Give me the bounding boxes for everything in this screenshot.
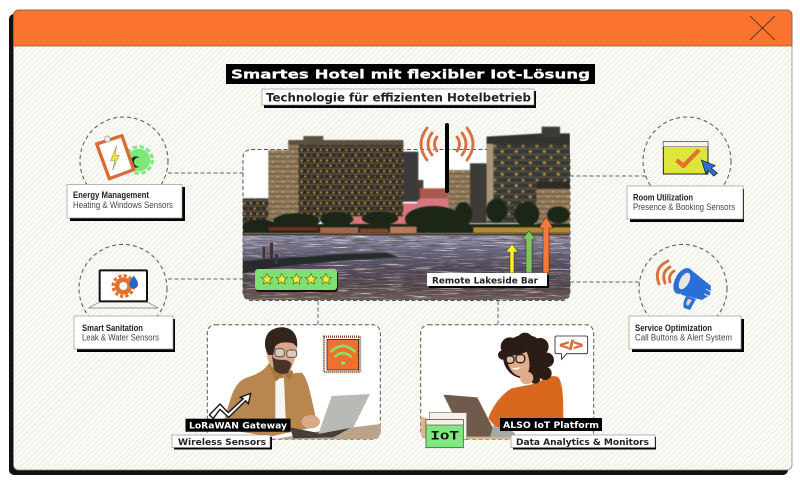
gateway label: LoRaWAN Gateway [189,422,287,432]
subtitle [262,89,536,108]
hand [520,372,533,384]
hotel scene [243,127,570,300]
arrow: green signal [522,231,536,273]
wireless sensors label [172,435,272,450]
laptop lid [318,394,370,434]
beard [272,353,292,374]
room label: Presence & Booking Sensors [633,202,736,212]
title: Smartes Hotel mit flexibler Iot-Lösung [231,66,590,82]
panel: hotel photo [243,127,570,301]
lake water [243,236,570,300]
platform label [500,418,602,431]
room label [627,186,744,222]
hand [301,415,320,428]
title [226,64,595,84]
woman with laptop [421,333,593,448]
neck and face [266,340,297,374]
arrow: yellow signal [506,244,518,273]
energy label: Energy Management [73,190,149,200]
shore buildings [243,227,570,236]
location label: Remote Lakeside Bar [432,276,539,286]
icon: megaphone [657,261,711,310]
rating stars [261,274,332,284]
tee [275,378,286,418]
location label [427,273,549,288]
shirt [224,364,317,437]
sanitation label: Smart Sanitation [82,323,143,333]
rating badge [255,269,338,292]
icon: wifi chip [324,337,360,372]
platform label: ALSO IoT Platform [503,421,599,431]
arrow: orange signal [539,217,553,273]
face [507,352,529,376]
connector lines [168,173,646,325]
orange title bar [14,10,792,46]
energy label: Heating & Windows Sensors [73,200,174,210]
hair [265,327,297,355]
data analytics label [511,435,656,450]
code speech bubble: </> [560,337,583,352]
laptop base [490,425,517,437]
glasses [506,355,525,363]
icon: checkmark window with cursor [663,142,717,176]
people on breakwater [263,243,278,264]
tree line [243,199,570,233]
icon: laptop with gear and drop [88,270,158,308]
data analytics label: Data Analytics & Monitors [516,438,649,448]
desk [273,424,381,439]
wireless sensors label: Wireless Sensors [178,438,266,448]
hair [498,333,554,384]
panel: room utilization [627,117,744,222]
laptop [443,395,497,437]
laptop base [290,428,351,438]
panel: LoRaWAN gateway [172,325,381,450]
smile [512,367,521,370]
collar [268,363,294,382]
energy label [67,184,185,221]
service label [629,316,744,352]
IoT window: IoT [430,429,459,444]
sanitation label [74,316,175,352]
panel: ALSO IoT platform [421,325,656,450]
code speech bubble [555,336,588,359]
icon: clipboard and gear [97,136,152,179]
glasses [275,349,297,357]
IoT window [426,413,467,448]
desk [420,416,511,440]
subtitle: Technologie für effizienten Hotelbetrieb [266,90,531,104]
sanitation label: Leak & Water Sensors [82,332,160,342]
icon: antenna with signal waves [421,123,473,193]
sweater [488,376,563,428]
gateway label [186,419,290,432]
breakwater [243,253,399,273]
growth arrow [209,393,251,418]
icon: close X [750,16,775,40]
panel: smart sanitation [74,244,175,352]
man with laptop [209,327,381,439]
service label: Call Buttons & Alert System [635,332,732,342]
panel: service optimization [629,244,744,352]
room label: Room Utilization [633,192,693,202]
panel: energy management [67,117,185,221]
service label: Service Optimization [635,323,712,333]
